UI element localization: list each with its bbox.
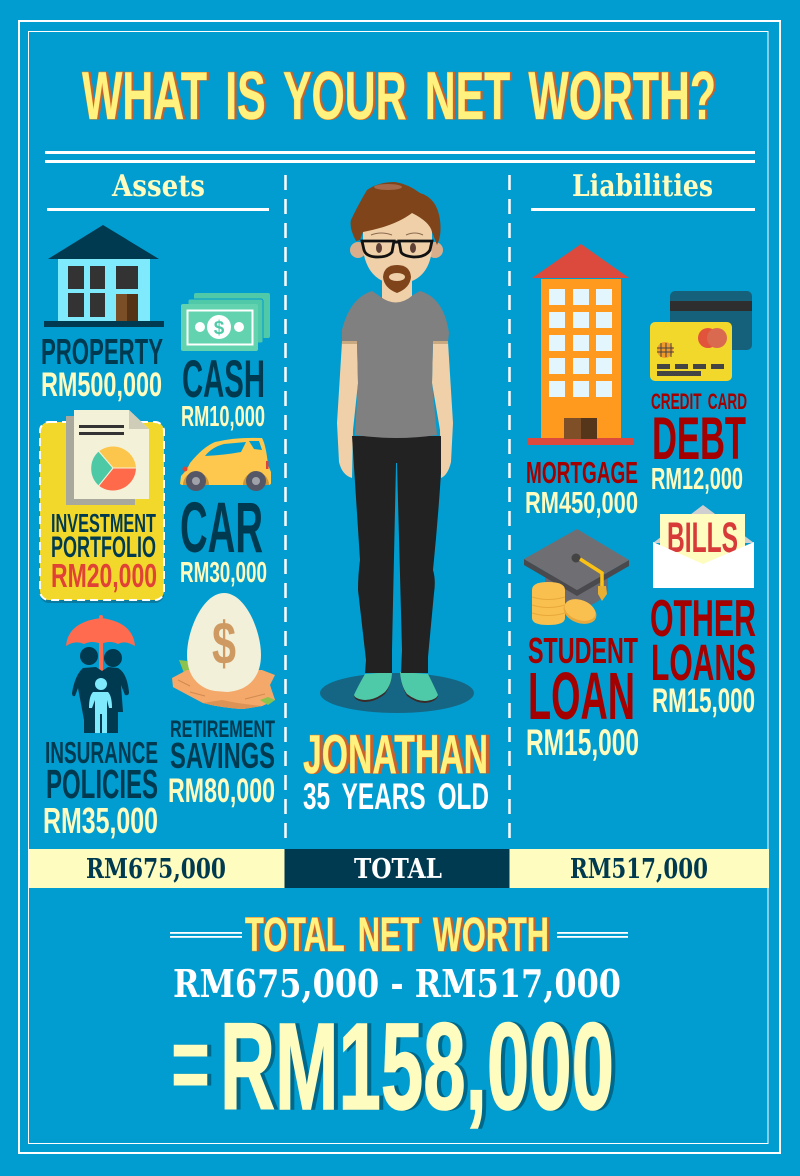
panel: liabilities	[524, 169, 756, 763]
label: total: TOTAL	[354, 854, 442, 885]
label: cash: CASH	[182, 350, 265, 409]
asset: property	[41, 225, 164, 404]
label: insurance: INSURANCE	[45, 735, 158, 770]
asset: insurance policies	[43, 615, 158, 841]
value: credit card debt: RM12,000	[651, 461, 743, 496]
heading: total net worth: TOTAL NET WORTH	[245, 909, 549, 962]
name: Jonathan: JONATHAN	[303, 723, 488, 785]
icon: banknotes: $	[214, 318, 225, 339]
label: loan: LOAN	[528, 659, 635, 734]
illustration: Jonathan	[320, 182, 474, 713]
icon: nest egg: $	[212, 610, 236, 677]
asset: car	[180, 438, 271, 589]
value: car: RM30,000	[180, 557, 267, 589]
value: cash: RM10,000	[181, 401, 265, 433]
value: student loan: RM15,000	[526, 722, 639, 763]
value: mortgage: RM450,000	[525, 485, 638, 520]
icon: envelope with bills	[653, 505, 754, 588]
icon: credit cards	[650, 291, 752, 381]
value: investment portfolio: RM20,000	[51, 557, 157, 594]
total: assets: RM675,000	[86, 854, 226, 885]
icon: house	[44, 225, 164, 327]
icon: graduation cap and coins	[524, 529, 629, 628]
liability: mortgage	[525, 244, 638, 520]
label: car: CAR	[180, 489, 263, 568]
panel: total net worth	[170, 909, 628, 1136]
label: policies: POLICIES	[46, 761, 158, 807]
icon: apartment building	[528, 244, 633, 445]
icon: family under umbrella	[66, 615, 135, 733]
label: savings: SAVINGS	[170, 735, 275, 776]
heading: liabilities: Liabilities	[572, 169, 713, 204]
result equals sign: =	[171, 1003, 210, 1124]
calculation: RM675,000 - RM517,000	[173, 961, 621, 1006]
heading: assets: Assets	[111, 169, 205, 204]
asset: cash	[181, 293, 270, 433]
liability: other loans	[650, 505, 756, 720]
label: investment: INVESTMENT	[51, 508, 156, 538]
liability: student loan	[524, 529, 639, 763]
value: property: RM500,000	[41, 366, 162, 404]
label: property: PROPERTY	[41, 331, 163, 372]
caption: age: 35 YEARS OLD	[303, 776, 489, 817]
icon: envelope with bills: BILLS	[667, 515, 738, 562]
label: retirement: RETIREMENT	[170, 716, 275, 743]
value: insurance policies: RM35,000	[43, 800, 158, 841]
label: student: STUDENT	[528, 630, 638, 671]
asset: retirement savings	[168, 593, 275, 810]
asset: investment portfolio callout	[40, 410, 164, 603]
icon: car	[180, 438, 271, 491]
totals bar	[29, 849, 769, 888]
panel: assets	[40, 169, 275, 841]
total: liabilities: RM517,000	[570, 854, 708, 885]
icon: nest egg	[172, 593, 275, 709]
label: mortgage: MORTGAGE	[526, 455, 638, 490]
icon: document with pie chart	[66, 410, 149, 505]
label: portfolio: PORTFOLIO	[51, 531, 156, 564]
panel: person	[303, 182, 489, 817]
liability: credit card debt	[650, 291, 752, 496]
value: retirement savings: RM80,000	[168, 772, 275, 810]
